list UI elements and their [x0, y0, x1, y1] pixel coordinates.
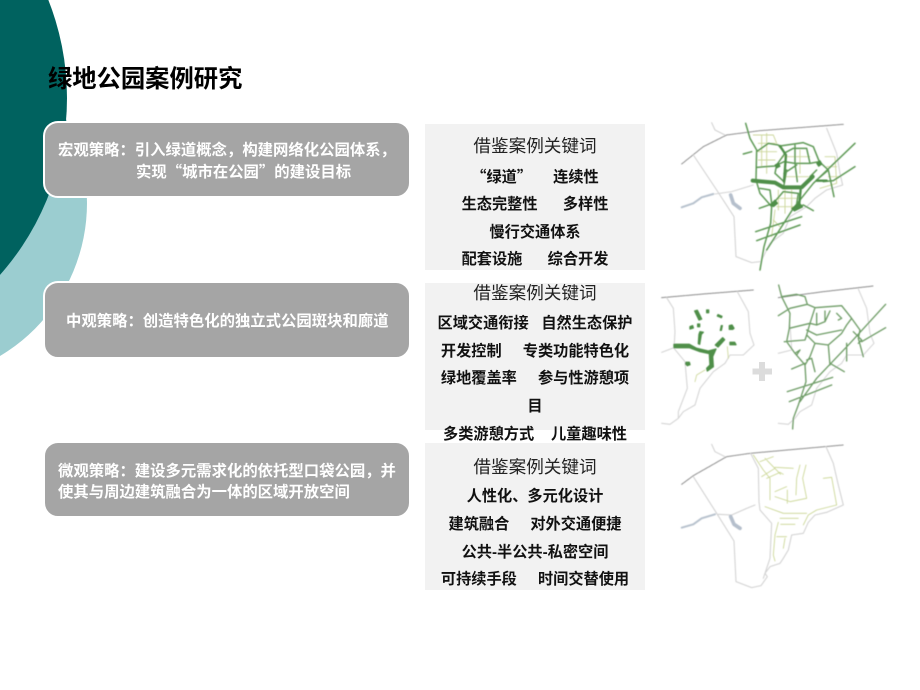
micro strategy text: 微观策略：建设多元需求化的依托型口袋公园，并 [58, 463, 396, 480]
map: meso parks patches [662, 290, 754, 424]
keywords 3 line 2: 建筑融合 对外交通便捷 [448, 516, 621, 533]
meso strategy text: 中观策略：创造特色化的独立式公园斑块和廊道 [66, 313, 389, 330]
keywords 1 heading: 借鉴案例关键词 [473, 136, 597, 156]
keywords 3 line 3: 公共-半公共-私密空间 [462, 544, 608, 561]
macro strategy text: 宏观策略：引入绿道概念，构建网络化公园体系， [58, 142, 396, 159]
micro strategy text [58, 462, 396, 501]
map: macro greenway network [682, 123, 855, 270]
macro strategy text: 实现“城市在公园”的建设目标 [136, 160, 351, 182]
macro strategy text [58, 142, 396, 182]
keywords 2 line 4: 目 [527, 398, 543, 415]
panel: keywords 2 background [425, 283, 645, 430]
panel: keywords 3 background [425, 443, 645, 590]
icon: plus sign [752, 362, 772, 381]
keywords 2 line 2: 开发控制 专类功能特色化 [441, 343, 629, 360]
keywords 2 heading: 借鉴案例关键词 [473, 283, 597, 303]
keywords 3 heading: 借鉴案例关键词 [473, 457, 597, 477]
panel: meso strategy [44, 282, 410, 358]
panel: keywords 1 background [425, 124, 645, 270]
map: micro pocket parks [682, 444, 843, 588]
title: 绿地公园案例研究 [48, 66, 242, 93]
keywords 2 line 5: 多类游憩方式 儿童趣味性 [443, 426, 627, 443]
micro strategy text: 使其与周边建筑融合为一体的区域开放空间 [58, 484, 350, 501]
panel: micro strategy [44, 442, 410, 517]
keywords 1 line 3: 慢行交通体系 [489, 224, 581, 241]
keywords 1 line 2: 生态完整性 多样性 [462, 196, 608, 213]
green patches [674, 310, 736, 371]
keywords 2 line 3: 绿地覆盖率 参与性游憩项 [441, 370, 629, 387]
keywords 3 line 4: 可持续手段 时间交替使用 [441, 571, 629, 588]
keywords 2 line 1: 区域交通衔接 自然生态保护 [438, 315, 632, 332]
keywords 1 line 4: 配套设施 综合开发 [462, 251, 608, 268]
decorative circles [0, 0, 87, 356]
map: meso road network [778, 285, 886, 429]
keywords 1 line 1: “绿道” 连续性 [471, 165, 599, 187]
panel: macro strategy [44, 122, 410, 197]
keywords 3 line 1: 人性化、多元化设计 [467, 488, 603, 505]
